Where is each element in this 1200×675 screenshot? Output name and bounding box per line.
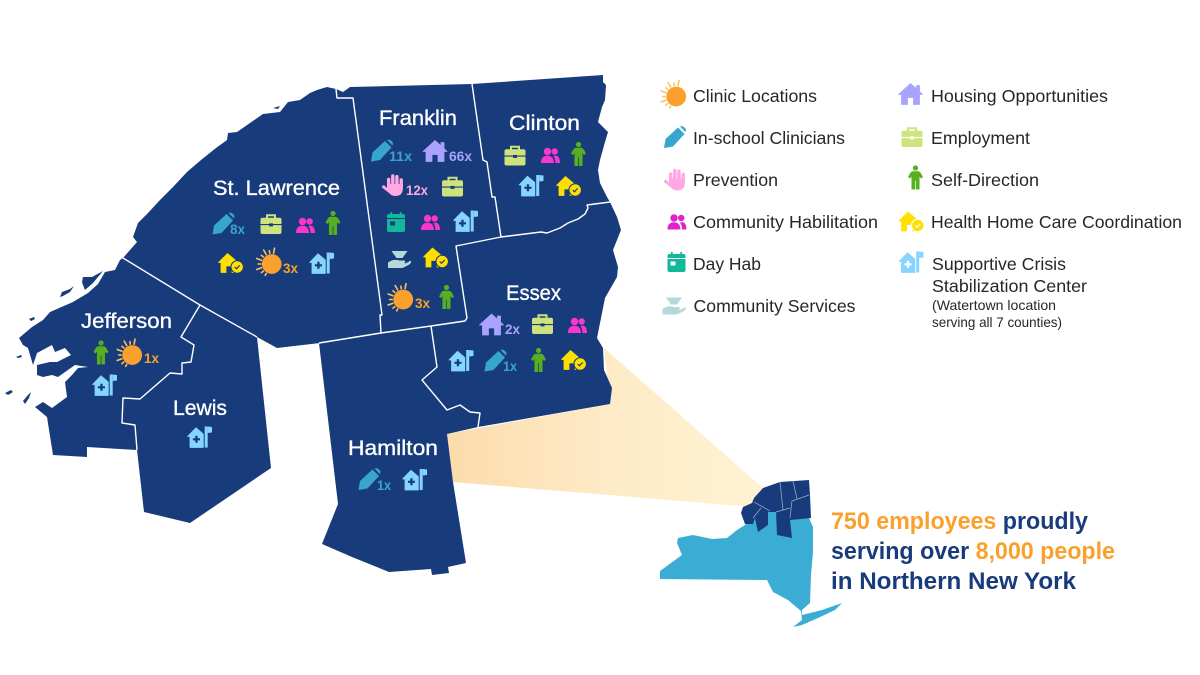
legend item: Clinic Locations [661, 81, 817, 108]
legend item: Day Hab [668, 252, 761, 274]
county shape: Essex [422, 202, 621, 427]
icon: health home [424, 248, 449, 268]
label: Essex: Essex [506, 282, 561, 305]
county: Clinton [472, 75, 610, 237]
icon: clinic [388, 284, 413, 311]
county shape: Franklin [336, 84, 501, 333]
count: 12x: 12x [406, 182, 428, 198]
county shape: St. Lawrence [123, 87, 382, 348]
icon: day hab [387, 212, 405, 232]
county shape: Clinton [472, 75, 610, 237]
label: Hamilton: Hamilton [348, 437, 438, 460]
callout text: 750 employees proudly [831, 508, 1089, 535]
label: Clinton: Clinton [509, 112, 580, 135]
icon: health home [562, 350, 587, 371]
icon: crisis center [449, 350, 474, 371]
icon: crisis center [92, 374, 117, 396]
count: 3x: 3x [415, 295, 430, 311]
icon: self-direction [94, 341, 108, 364]
county: Franklin [336, 84, 501, 333]
legend item: Community Services: Community Services [694, 296, 856, 316]
icon: health home [556, 176, 582, 197]
county shape: Hamilton [319, 326, 480, 575]
highlighted counties [741, 480, 811, 538]
icon: pencil 1x [484, 350, 506, 372]
icon: crisis center [188, 426, 212, 448]
icon: crisis center [402, 469, 427, 490]
legend item: Community Habilitation: Community Habilitation [693, 212, 878, 232]
icon: community habilitation [296, 218, 315, 233]
icon: self-direction [571, 142, 586, 166]
icon: self-direction [531, 348, 546, 372]
legend item: Supportive Crisis Stabilization Center: Stabilization Center [932, 276, 1087, 296]
legend item: Employment: Employment [931, 128, 1030, 148]
count: 8x: 8x [230, 221, 245, 237]
mini map: New York State [660, 480, 842, 627]
icon: prevention 12x [382, 176, 403, 196]
icon: crisis center [519, 175, 544, 196]
legend item: Supportive Crisis Stabilization Center: serving all 7 counties) [932, 314, 1062, 330]
icon: employment [260, 215, 282, 234]
islands [5, 106, 280, 404]
icon: employment [532, 315, 553, 334]
callout text: in Northern New York [831, 568, 1077, 595]
icon: crisis center [310, 252, 334, 274]
legend item: Self-Direction: Self-Direction [931, 170, 1039, 190]
icon: community habilitation [568, 318, 587, 333]
state shape [660, 505, 842, 627]
icon: housing 66x [423, 140, 447, 162]
legend item: Supportive Crisis Stabilization Center: (Watertown location [932, 297, 1056, 313]
legend item: Health Home Care Coordination: Health Home Care Coordination [931, 212, 1182, 232]
icon: pencil 8x [212, 213, 234, 234]
callout text [831, 508, 1115, 595]
icon: community habilitation [421, 215, 440, 230]
count: 1x: 1x [503, 358, 517, 374]
label: Jefferson: Jefferson [81, 310, 172, 333]
legend [661, 81, 1182, 330]
icon: employment [504, 147, 526, 166]
icon: crisis center [454, 210, 478, 232]
county shape: Lewis [122, 305, 271, 523]
icon: employment [442, 178, 463, 196]
callout text: serving over 8,000 people [831, 538, 1115, 565]
icon: community services [388, 251, 411, 268]
count: 66x: 66x [449, 148, 472, 164]
legend item: Supportive Crisis Stabilization Center [899, 252, 1087, 330]
count: 3x: 3x [283, 260, 298, 276]
label: St. Lawrence: St. Lawrence [213, 177, 340, 200]
legend item: Day Hab: Day Hab [693, 254, 761, 274]
county: Lewis [122, 305, 271, 523]
county: Hamilton [319, 326, 480, 575]
icon: housing 2x [480, 314, 504, 335]
count: 11x: 11x [389, 148, 412, 164]
icon: self-direction [326, 211, 340, 235]
label: Franklin: Franklin [379, 107, 457, 130]
legend item: In-school Clinicians: In-school Clinicians [693, 128, 845, 148]
icon: self-direction [439, 285, 454, 309]
county: St. Lawrence [123, 87, 382, 348]
map of seven counties [5, 75, 621, 575]
label: Lewis: Lewis [173, 397, 227, 420]
callout wedge [447, 348, 763, 507]
icon: pencil 1x [358, 468, 380, 490]
icon: pencil 11x [371, 140, 393, 162]
icon: clinic [257, 248, 282, 275]
icon: community habilitation [541, 148, 560, 163]
county: Essex [422, 202, 621, 427]
icon: health home [218, 254, 244, 274]
legend item: Clinic Locations: Clinic Locations [693, 86, 817, 106]
count: 1x: 1x [144, 350, 159, 366]
legend item: Supportive Crisis Stabilization Center: Supportive Crisis [932, 254, 1066, 274]
icon: clinic [117, 339, 142, 366]
county shape: Jefferson [19, 258, 200, 457]
count: 1x: 1x [377, 477, 391, 493]
legend item: Prevention: Prevention [693, 170, 778, 190]
legend item: Self-Direction [908, 166, 1039, 190]
count: 2x: 2x [505, 321, 520, 337]
legend item: Housing Opportunities: Housing Opportunities [931, 86, 1108, 106]
county: Jefferson [5, 106, 280, 457]
